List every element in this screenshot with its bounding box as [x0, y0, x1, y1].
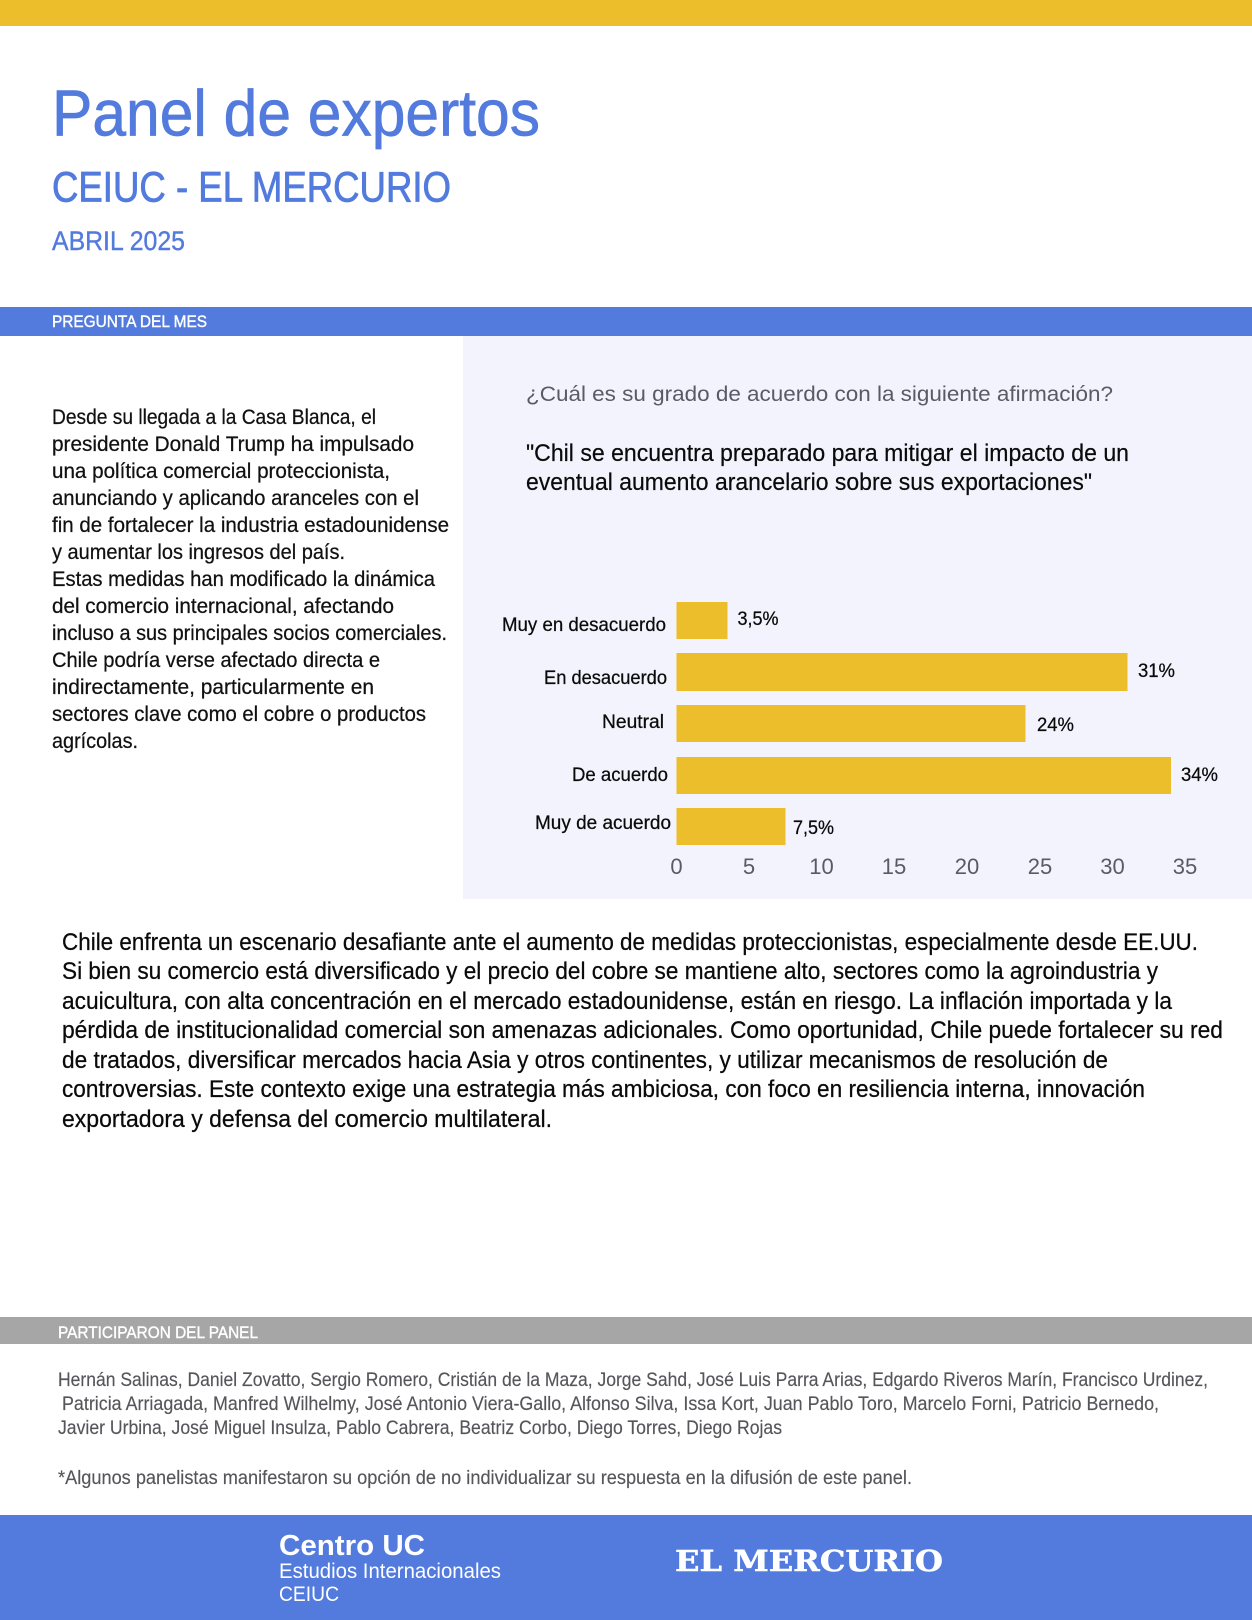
footer band — [0, 1515, 1252, 1620]
header block — [52, 76, 540, 256]
logo: El Mercurio: EL MERCURIO — [675, 1544, 943, 1578]
subtitle: CEIUC - EL MERCURIO — [52, 164, 451, 212]
analysis text block: Chile enfrenta un escenario desafiante ante el aumento de medidas proteccionistas, especialmente desde EE.UU. — [62, 929, 1198, 956]
section bar: participaron del panel — [0, 1317, 1252, 1344]
intro text block: sectores clave como el cobre o productos — [52, 702, 426, 726]
logo: Centro UC — [279, 1530, 501, 1606]
x axis labels: 20 — [955, 854, 979, 879]
category labels — [502, 614, 671, 834]
value labels — [738, 609, 1218, 839]
analysis text block: exportadora y defensa del comercio multilateral. — [62, 1106, 552, 1133]
intro text block: agrícolas. — [52, 729, 138, 753]
survey statement: "Chil se encuentra preparado para mitigar el impacto de un — [526, 440, 1129, 467]
analysis text block: de tratados, diversificar mercados hacia Asia y otros continentes, y utilizar mecanismos de resolución de — [62, 1047, 1108, 1074]
intro text block — [52, 405, 449, 753]
survey statement: eventual aumento arancelario sobre sus exportaciones" — [526, 469, 1092, 496]
x axis labels: 30 — [1100, 854, 1125, 879]
panel: survey question and chart — [463, 336, 1252, 899]
logo: Centro UC: CEIUC — [279, 1583, 339, 1606]
analysis text block: controversias. Este contexto exige una estrategia más ambiciosa, con foco en resiliencia interna, innovación — [62, 1076, 1145, 1103]
intro text block: Estas medidas han modificado la dinámica — [52, 567, 435, 591]
footnote: *Algunos panelistas manifestaron su opción de no individualizar su respuesta en la difusión de este panel. — [58, 1467, 912, 1489]
intro text block: y aumentar los ingresos del país. — [52, 540, 345, 564]
analysis text block: acuicultura, con alta concentración en el mercado estadounidense, están en riesgo. La inflación importada y la — [62, 988, 1173, 1015]
bars — [676, 602, 1171, 845]
x axis labels: 0 — [670, 854, 683, 879]
survey statement — [526, 440, 1129, 496]
value labels: 34% — [1181, 765, 1218, 786]
intro text block: Chile podría verse afectado directa e — [52, 648, 380, 672]
intro text block: indirectamente, particularmente en — [52, 675, 374, 699]
date: ABRIL 2025 — [52, 226, 185, 256]
title: Panel de expertos — [52, 76, 540, 150]
logo: Centro UC: Estudios Internacionales — [279, 1560, 501, 1583]
x axis labels: 5 — [743, 854, 755, 879]
participants list: Patricia Arriagada, Manfred Wilhelmy, José Antonio Viera-Gallo, Alfonso Silva, Issa Kort, Juan Pablo Toro, Marcelo Forni, Patricio Bernedo, — [62, 1393, 1159, 1415]
section bar: pregunta del mes: PREGUNTA DEL MES — [52, 312, 207, 331]
analysis text block — [62, 929, 1223, 1133]
value labels: 7,5% — [793, 818, 834, 839]
x axis labels: 35 — [1173, 854, 1197, 879]
survey question: ¿Cuál es su grado de acuerdo con la siguiente afirmación? — [526, 382, 1113, 406]
x axis labels: 10 — [809, 854, 834, 879]
section bar: participaron del panel: PARTICIPARON DEL PANEL — [58, 1323, 258, 1342]
logo: Centro UC: Centro UC — [279, 1530, 425, 1562]
bar chart — [502, 602, 1218, 879]
category labels: En desacuerdo — [544, 667, 667, 689]
analysis text block: pérdida de institucionalidad comercial son amenazas adicionales. Como oportunidad, Chile puede fortalecer su red — [62, 1017, 1223, 1044]
intro text block: fin de fortalecer la industria estadounidense — [52, 513, 449, 537]
x axis labels: 15 — [882, 854, 906, 879]
category labels: Neutral — [602, 711, 664, 733]
intro text block: Desde su llegada a la Casa Blanca, el — [52, 405, 376, 429]
top yellow band — [0, 0, 1252, 26]
category labels: Muy de acuerdo — [535, 812, 671, 834]
section bar: pregunta del mes — [0, 307, 1252, 336]
value labels: 24% — [1037, 715, 1074, 736]
participants list: Javier Urbina, José Miguel Insulza, Pablo Cabrera, Beatriz Corbo, Diego Torres, Diego Rojas — [58, 1417, 782, 1439]
category labels: De acuerdo — [572, 764, 668, 786]
x axis labels — [670, 854, 1197, 879]
intro text block: anunciando y aplicando aranceles con el — [52, 486, 419, 510]
intro text block: incluso a sus principales socios comerciales. — [52, 621, 447, 645]
participants list — [58, 1369, 1208, 1439]
intro text block: del comercio internacional, afectando — [52, 594, 394, 618]
analysis text block: Si bien su comercio está diversificado y el precio del cobre se mantiene alto, sectores como la agroindustria y — [62, 958, 1158, 985]
intro text block: una política comercial proteccionista, — [52, 459, 390, 483]
x axis labels: 25 — [1028, 854, 1052, 879]
value labels: 3,5% — [738, 609, 779, 630]
value labels: 31% — [1138, 661, 1175, 682]
intro text block: presidente Donald Trump ha impulsado — [52, 432, 414, 456]
category labels: Muy en desacuerdo — [502, 614, 666, 636]
